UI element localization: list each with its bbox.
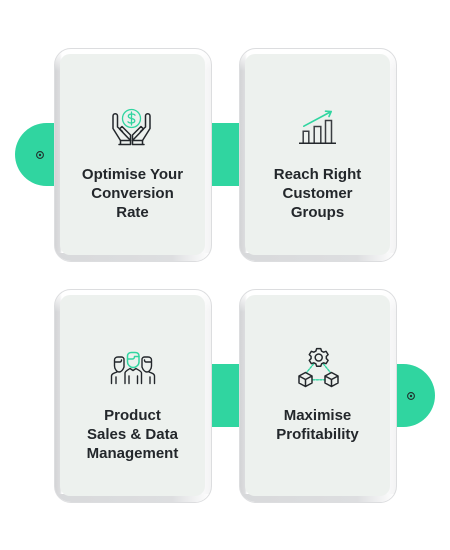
icon: right target dot	[407, 392, 415, 400]
heading: Profitability	[276, 426, 359, 442]
panel: maximise profitability	[239, 289, 397, 503]
panel: product sales and data management	[54, 289, 212, 503]
heading	[82, 166, 183, 220]
heading: Groups	[291, 204, 344, 220]
top green connector	[205, 123, 245, 186]
heading: Optimise Your	[82, 166, 183, 182]
icon: left target dot	[36, 151, 44, 159]
heading: Maximise	[284, 406, 351, 424]
heading	[274, 166, 362, 220]
heading: Conversion	[91, 184, 174, 202]
icon: team of three people	[110, 352, 156, 384]
heading: Rate	[116, 204, 149, 220]
heading	[87, 406, 178, 462]
heading	[276, 406, 359, 442]
icon: hands holding dollar coin	[112, 108, 151, 146]
heading: Management	[87, 444, 178, 462]
right green tab	[390, 364, 435, 426]
heading: Product	[104, 406, 161, 424]
panel: optimise your conversion rate	[54, 48, 212, 262]
panel: reach right customer groups	[239, 48, 397, 262]
bottom green connector	[205, 364, 245, 426]
icon: rising bar chart with arrow	[299, 110, 336, 144]
heading: Reach Right	[274, 166, 361, 182]
left green tab	[15, 123, 60, 186]
heading: Sales & Data	[87, 426, 178, 442]
icon: gear and connected boxes	[298, 348, 339, 388]
heading: Customer	[282, 184, 352, 202]
